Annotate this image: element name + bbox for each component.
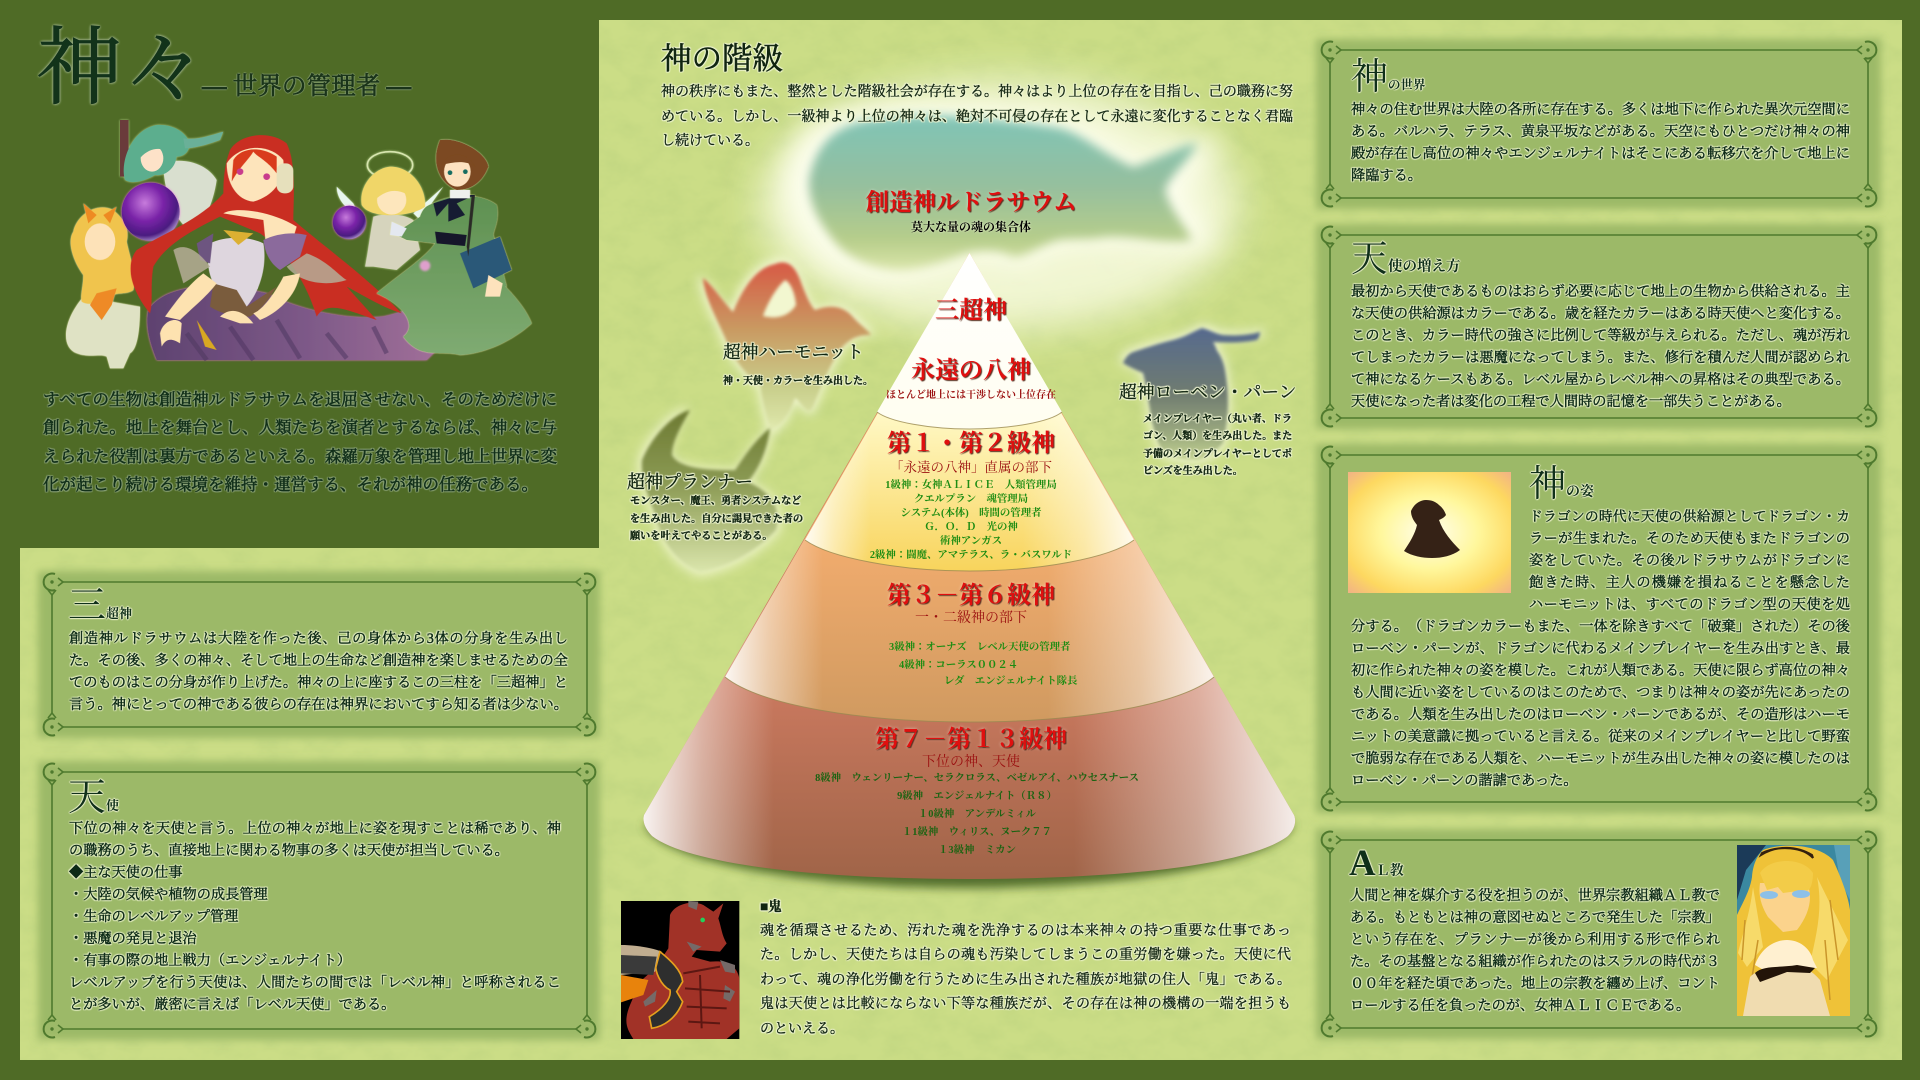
intro text: 化が起こり続ける環境を維持・運営する、それが神の任務である。 — [43, 475, 538, 494]
heading: AＬ教 — [1349, 843, 1404, 884]
body text — [1528, 508, 1851, 613]
title — [37, 22, 413, 116]
body text: レベルアップを行う天使は、人間たちの間では「レベル神」と呼称されるこ — [69, 975, 561, 991]
god list: 2級神：闘魔、アマテラス、ラ・バスワルド — [870, 550, 1072, 561]
god list — [815, 772, 1139, 856]
intro text: 創られた。地上を舞台とし、人類たちを演者とするならば、神々に与 — [43, 418, 557, 437]
body text: ラーが生まれた。そのため天使もまたドラゴンの — [1529, 531, 1850, 547]
green-haired goddess — [120, 120, 223, 230]
body text: ある。バルハラ、テラス、黄泉平坂などがある。天空にもひとつだけ神々の神 — [1351, 124, 1850, 140]
body text: ◆主な天使の仕事 — [69, 865, 183, 881]
title: 神々 — [37, 22, 207, 116]
label: 創造神ルドラサウム: 創造神ルドラサウム — [865, 190, 1077, 216]
intro: rank society: めている。しかし、一級神より上位の神々は、絶対不可侵の存在として永遠に変化することなく君臨 — [661, 110, 1293, 124]
god list: 1級神：女神ＡＬＩＣＥ 人類管理局 — [885, 480, 1057, 491]
silhouette: Rowen Pahn — [1119, 324, 1264, 464]
god list: １1級神 ウィリス、ヌーク７７ — [902, 827, 1052, 838]
body text continued: 分する。（ドラゴンカラーもまた、一体を除きすべて「破棄」された）その後 — [1351, 619, 1850, 635]
body text: 下位の神々を天使と言う。上位の神々が地上に姿を現すことは稀であり、神 — [69, 821, 561, 837]
caption: プランナー: を生み出した。自分に謁見できた者の — [630, 514, 803, 524]
body text: とが多いが、厳密に言えば「レベル天使」である。 — [69, 997, 395, 1013]
god list: 9級神 エンジェルナイト（Ｒ８） — [897, 791, 1057, 802]
silhouette image — [1348, 472, 1511, 593]
body text: ある。もともとは神の意図せぬところで発生した「宗教」 — [1350, 910, 1720, 926]
oni text: 魂を循環させるため、汚れた魂を洗浄するのは本来神々の持つ重要な仕事であっ — [760, 924, 1291, 939]
rank note: 下位の神、天使 — [922, 755, 1020, 770]
oni text: わって、魂の浄化労働を行うために生み出された種族が地獄の住人「鬼」である。 — [760, 973, 1291, 988]
green-dressed goddess — [377, 140, 532, 355]
caption: プランナー — [628, 494, 804, 542]
god list — [870, 479, 1072, 561]
label: 魂の集合体: 莫大な量の魂の集合体 — [911, 220, 1031, 234]
character illustration group — [65, 118, 532, 370]
heading: 鬼: ■鬼 — [760, 899, 782, 914]
god list: １0級神 アンデルミィル — [918, 809, 1036, 820]
caption: プランナー: 願いを叶えてやることがある。 — [630, 531, 773, 542]
red-haired goddess — [130, 135, 464, 360]
god list: システム(本体) 時間の管理者 — [901, 508, 1041, 519]
caption: ローベン・パーン: ゴン、人類）を生み出した。また — [1143, 431, 1292, 442]
god list: クエルプラン 魂管理局 — [914, 494, 1028, 505]
body text: ００年を経た頃であった。地上の宗教を纏め上げ、コント — [1350, 976, 1720, 992]
body text continued: で脆弱な存在である人類を、ハーモニットが生み出した神々の姿に模したのは — [1351, 751, 1850, 767]
caption: ローベン・パーン — [1142, 412, 1293, 477]
rank note: 一・二級神の部下 — [915, 611, 1027, 626]
body text: ロールする任を負ったのが、女神ＡＬＩＣＥである。 — [1350, 998, 1690, 1014]
heading: 三超神 — [68, 585, 132, 627]
rank: 第3-第6級神: 第３－第６級神 — [887, 583, 1055, 609]
god list: 3級神：オーナズ レベル天使の管理者 — [889, 642, 1070, 653]
rank: 三超神: 三超神 — [935, 298, 1007, 324]
caption: プランナー: モンスター、魔王、勇者システムなど — [630, 496, 801, 507]
body text continued — [1350, 617, 1851, 789]
rank: 永遠の八神: 永遠の八神 — [911, 358, 1031, 384]
rank: 第1・第2級神 — [870, 430, 1072, 561]
body text: ・有事の際の地上戦力（エンジェルナイト） — [69, 953, 351, 969]
intro text: すべての生物は創造神ルドラサウムを退屈させない、そのためだけに — [43, 390, 557, 409]
body text — [68, 820, 562, 1013]
panel: 天使 — [34, 758, 604, 1044]
oni portrait image — [621, 901, 740, 1039]
oni text — [759, 922, 1292, 1037]
body text: ・生命のレベルアップ管理 — [69, 909, 238, 925]
rank: 第3-第6級神 — [887, 581, 1078, 687]
god list: Ｇ．Ｏ．Ｄ 光の神 — [924, 522, 1018, 533]
heading: 天使の増え方 — [1351, 239, 1460, 280]
label: 超神プランナー: 超神プランナー — [627, 472, 753, 492]
subtitle: — 世界の管理者 — — [202, 73, 411, 100]
rank note: ほとんど地上には干渉しない上位存在 — [886, 390, 1056, 401]
oni text: のといえる。 — [760, 1022, 844, 1037]
body text — [1350, 282, 1851, 410]
body text: という存在を、プランナーが後から利用する形で作られ — [1350, 932, 1720, 948]
panel: AL教 — [1312, 826, 1884, 1042]
intro: rank society — [660, 82, 1294, 149]
panel: 神の世界 — [1312, 36, 1884, 212]
heading: 神の世界 — [1351, 57, 1426, 98]
magic light sparkle — [420, 260, 430, 271]
pyramid of divine ranks — [643, 253, 1295, 888]
body text: て神になるケースもある。レベル屋からレベル神への昇格はその典型である。 — [1351, 372, 1850, 388]
silhouette: Harmonit — [698, 257, 876, 435]
body text: てのものはこの分身が作り上げた。神々の上に座するこの三柱を「三超神」と — [69, 675, 568, 691]
caption: ローベン・パーン: メインプレイヤー（丸い者、ドラ — [1143, 414, 1292, 425]
body text: ・大陸の気候や植物の成長管理 — [69, 887, 268, 903]
body text: 天使になった者は変化の工程で人間時の記憶を一部失うことがある。 — [1351, 394, 1791, 410]
body text: の職務のうち、直接地上に関わる物事の多くは天使が担当している。 — [69, 843, 509, 859]
body text: 創造神ルドラサウムは大陸を作った後、己の身体から3体の分身を生み出し — [69, 631, 568, 647]
label: 超神ローベン・パーン: 超神ローベン・パーン — [1119, 382, 1296, 402]
caption: ローベン・パーン: 予備のメインプレイヤーとしてポ — [1143, 449, 1292, 460]
silhouette: whale Ludorasaum — [760, 80, 1240, 330]
body text: ドラゴンの時代に天使の供給源としてドラゴン・カ — [1529, 509, 1850, 524]
body text: た。その基盤となる組織が作られたのはスラルの時代が３ — [1350, 954, 1720, 970]
body text continued: も人間に近い姿をしているのはこのためで、つまりは神々の姿が先にあったの — [1351, 685, 1850, 701]
body text: 神々の住む世界は大陸の各所に存在する。多くは地下に作られた異次元空間に — [1351, 102, 1850, 118]
heading: 神の階級: 神の階級 — [661, 42, 783, 76]
body text continued: ニットの美意識に拠っていると言える。従来のメインプレイヤーと比して野蛮 — [1351, 729, 1850, 745]
oni text: た。しかし、天使たちは自らの魂も汚染してしまうこの重労働を嫌った。天使に代 — [760, 948, 1291, 963]
body text continued: である。人類を生み出したのはローベン・パーンであるが、その造形はハーモ — [1351, 707, 1850, 723]
body text: ・悪魔の発見と退治 — [69, 931, 197, 947]
blonde angel — [337, 152, 443, 270]
body text — [1350, 886, 1721, 1014]
body text: 人間と神を媒介する役を担うのが、世界宗教組織ＡＬ教で — [1350, 888, 1720, 904]
god list: 8級神 ウェンリーナー、セラクロラス、ベゼルアイ、ハウセスナース — [815, 773, 1139, 784]
body text — [68, 629, 569, 713]
rank: 第1・第2級神: 第１・第２級神 — [887, 431, 1055, 457]
body text: ハーモニットは、すべてのドラゴン型の天使を処 — [1529, 597, 1850, 613]
intro text — [42, 390, 558, 494]
large purple orb — [122, 183, 180, 241]
body text: 殿が存在し高位の神々やエンジェルナイトはそこにある転移穴を介して地上に — [1351, 146, 1850, 162]
body text — [1350, 100, 1851, 184]
god list: 術神アンガス — [940, 536, 1002, 547]
god list: レダ エンジェルナイト隊長 — [944, 676, 1077, 687]
silhouette: Planner — [638, 406, 781, 576]
small purple orb — [333, 206, 366, 239]
god list: 4級神：コーラス００２４ — [899, 660, 1018, 671]
caption: ローベン・パーン: ピンズを生み出した。 — [1143, 466, 1243, 477]
panel: 三超神 — [34, 568, 604, 742]
body text: た。その後、多くの神々、そして地上の生命など創造神を楽しませるための全 — [69, 653, 568, 669]
heading: 天使 — [68, 777, 119, 819]
back left blonde girl — [66, 203, 140, 368]
body text continued: ローベン・パーンが、ドラゴンに代わるメインプレイヤーを生み出すとき、最 — [1351, 641, 1850, 657]
label: 超神ハーモニット: 超神ハーモニット — [723, 342, 864, 362]
body text: このとき、カラー時代の強さに比例して等級が与えられる。ただし、魂が汚れ — [1351, 328, 1850, 344]
body text: 言う。神にとっての神である彼らの存在は神界においてすら知る者は少ない。 — [69, 697, 568, 713]
body text: な天使の供給源はカラーである。歳を経たカラーはある時天使へと変化する。 — [1351, 306, 1850, 322]
intro: rank society: し続けている。 — [661, 134, 759, 149]
intro text: えられた役割は裏方であるといえる。森羅万象を管理し地上世界に変 — [43, 447, 557, 466]
body text: 姿をしていた。その後ルドラサウムがドラゴンに — [1529, 553, 1850, 569]
caption: ハーモニット: 神・天使・カラーを生み出した。 — [723, 376, 873, 387]
god list: １3級神 ミカン — [938, 845, 1016, 856]
paper texture — [1300, 670, 1306, 674]
rank note: 「永遠の八神」直属の部下 — [890, 460, 1052, 475]
body text continued: 初に作られた神々の姿を模した。これが人類である。天使に限らず高位の神々 — [1351, 663, 1850, 679]
intro: rank society: 神の秩序にもまた、整然とした階級社会が存在する。神々はより上位の存在を目指し、己の職務に努 — [661, 85, 1293, 100]
body text: 飽きた時、主人の機嫌を損ねることを懸念した — [1529, 575, 1850, 591]
oni text: 鬼は天使とは比較にならない下等な種族だが、その存在は神の機構の一端を担うも — [760, 997, 1291, 1012]
rank: 第7-第13級神 — [815, 725, 1139, 856]
panel: 神の姿 — [1312, 440, 1884, 816]
heading: 神の姿 — [1529, 464, 1594, 505]
body text: てしまったカラーは悪魔になってしまう。また、修行を積んだ人間が認められ — [1351, 350, 1850, 366]
rank: 第7-第13級神: 第７－第１３級神 — [875, 727, 1067, 753]
body text continued: ローベン・パーンの諧謔であった。 — [1351, 773, 1578, 789]
body text: 最初から天使であるものはおらず必要に応じて地上の生物から供給される。主 — [1351, 284, 1850, 300]
body text: 降臨する。 — [1351, 168, 1422, 184]
portrait window — [1737, 845, 1850, 1016]
panel: 天使の増え方 — [1312, 220, 1884, 432]
